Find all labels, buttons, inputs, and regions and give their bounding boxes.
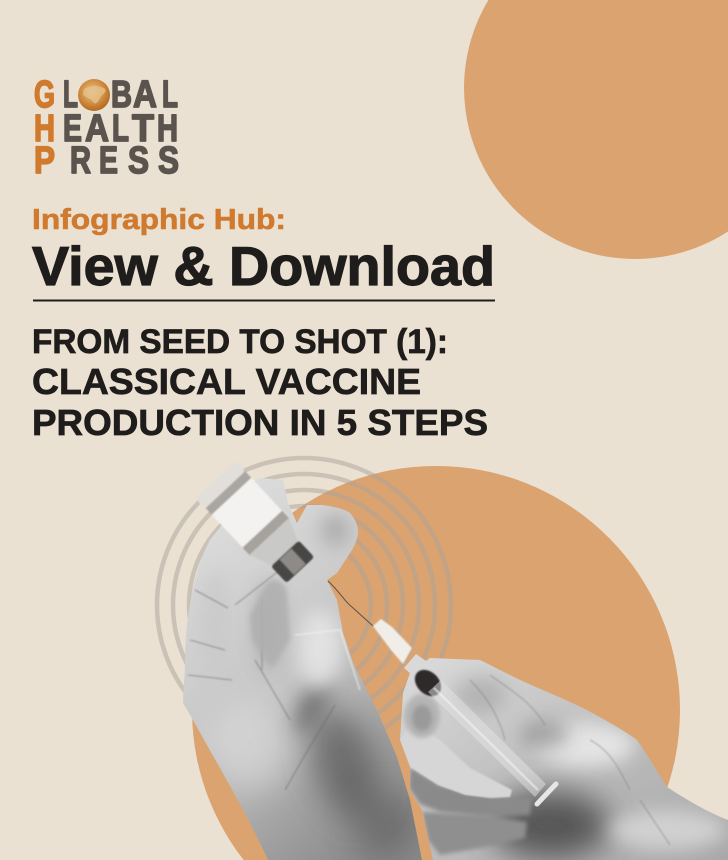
- logo row: PRESS: [34, 140, 179, 182]
- logo row: GLOBAL: B: [111, 74, 132, 116]
- syringe collar: [404, 654, 432, 682]
- icon: thumb over vial neck: [250, 580, 290, 668]
- decorative circle: top right: [464, 0, 728, 259]
- logo row: PRESS: S: [158, 140, 179, 182]
- logo globe: [78, 79, 110, 111]
- heading: View & Download: View & Download: [32, 235, 495, 297]
- title: CLASSICAL VACCINE: [32, 361, 421, 402]
- logo row: HEALTH: E: [63, 108, 82, 150]
- index finger: [400, 737, 512, 799]
- logo row: GLOBAL: G: [34, 74, 55, 116]
- logo row: PRESS: E: [99, 140, 118, 182]
- icon: syringe needle: [328, 581, 373, 626]
- syringe barrel: [428, 680, 546, 797]
- syringe dark tip: [410, 665, 446, 701]
- logo row: PRESS: R: [70, 140, 91, 182]
- syringe flange: [537, 784, 556, 804]
- logo row: HEALTH: L: [112, 108, 129, 150]
- logo row: HEALTH: H: [157, 108, 178, 150]
- lower finger 2: [422, 812, 527, 855]
- title: PRODUCTION IN 5 STEPS: [32, 402, 488, 443]
- logo row: HEALTH: H: [34, 108, 55, 150]
- logo row: PRESS: S: [128, 140, 149, 182]
- logo row: GLOBAL: [34, 74, 178, 116]
- concentric rings: [157, 458, 451, 752]
- decorative circle: bottom: [192, 466, 680, 860]
- lower finger 1: [409, 767, 532, 816]
- kicker: Infographic Hub: Infographic Hub:: [32, 204, 286, 236]
- icon: syringe: [373, 619, 556, 804]
- icon: vial: [195, 460, 321, 589]
- syringe needle hub: [373, 619, 412, 664]
- title: FROM SEED TO SHOT (1):: [32, 323, 448, 361]
- logo row: GLOBAL: A: [133, 74, 157, 116]
- logo row: PRESS: P: [34, 140, 55, 182]
- logo row: GLOBAL: L: [63, 74, 78, 116]
- logo: Global Health Press: [34, 74, 179, 182]
- title: [32, 323, 488, 443]
- logo row: GLOBAL: L: [162, 74, 178, 116]
- icon: gloved left hand holding vial: [183, 478, 422, 860]
- icon: gloved right hand: [400, 658, 728, 860]
- logo row: HEALTH: T: [132, 108, 154, 150]
- logo row: HEALTH: [34, 108, 178, 150]
- logo row: HEALTH: A: [85, 108, 109, 150]
- thumb: [404, 694, 440, 738]
